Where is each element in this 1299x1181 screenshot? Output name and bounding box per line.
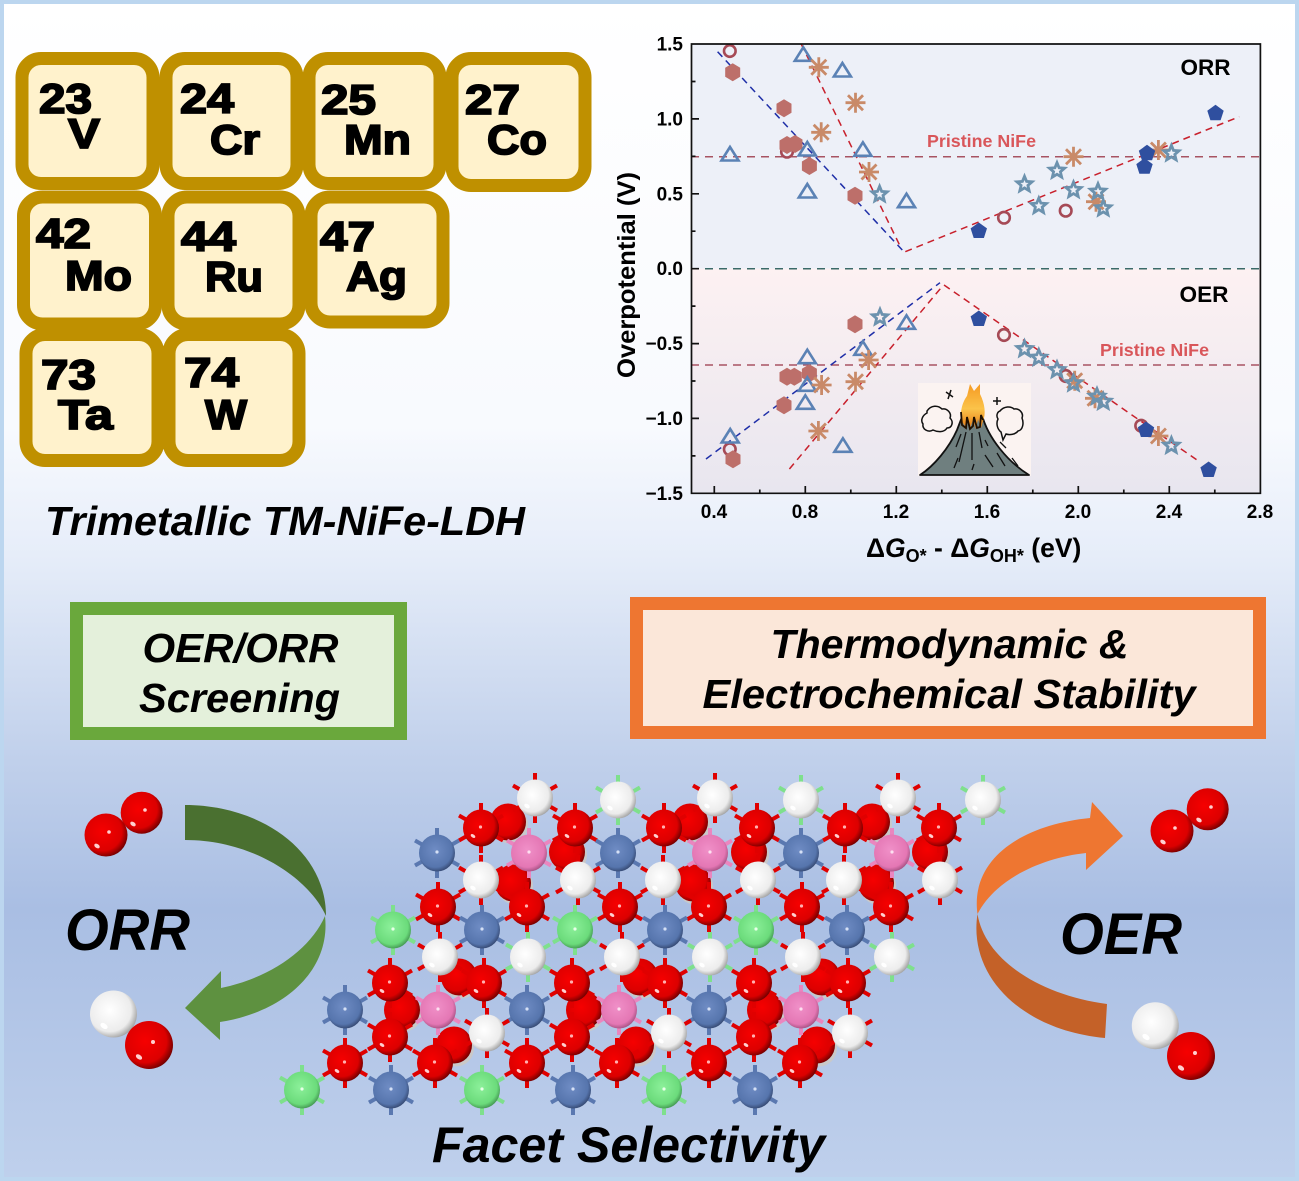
- series: stars: [872, 145, 1179, 452]
- arrow: OER: [976, 802, 1123, 1038]
- card: Mn: Mn: [344, 116, 411, 163]
- label: OER: OER: [1060, 902, 1182, 967]
- x axis title: OH*: [990, 546, 1024, 566]
- x axis tick labels: 0.8: [792, 502, 818, 523]
- card: V: V: [68, 110, 100, 157]
- card: Ag: 47: [320, 213, 375, 260]
- x axis title: G: [969, 533, 990, 563]
- pristine NiFe reference lines: [691, 157, 1260, 365]
- series: pentagons: [971, 105, 1224, 477]
- card: Mn: [309, 58, 440, 184]
- x axis title: O*: [906, 546, 927, 566]
- x axis tick labels: 2.8: [1247, 502, 1273, 523]
- label: OER: OER: [1180, 282, 1229, 307]
- x axis title: ΔG: [866, 533, 906, 563]
- card: Co: Co: [487, 116, 547, 163]
- y axis tick labels: 0.5: [657, 184, 683, 206]
- molecule: O2 right: [1150, 788, 1229, 852]
- card: V: [22, 58, 153, 184]
- card: Ta: [26, 334, 158, 460]
- card: Co: [452, 58, 585, 186]
- y axis tick labels: −1.5: [645, 484, 683, 505]
- card: V: 23: [39, 75, 92, 122]
- card: Ru: Ru: [205, 253, 263, 300]
- y axis title: Overpotential (V): [613, 172, 641, 378]
- series: hexagons: [725, 63, 862, 468]
- x axis tick labels: 1.6: [974, 502, 1000, 523]
- heading: Trimetallic TM-NiFe-LDH: Trimetallic TM-NiFe-LDH: [45, 498, 526, 544]
- box: OER/ORR Screening: [76, 608, 400, 734]
- icon: volcano: [918, 383, 1031, 476]
- x axis tick labels: [701, 502, 1273, 523]
- card: Mo: [24, 197, 156, 324]
- heading: Facet Selectivity: Facet Selectivity: [432, 1117, 827, 1173]
- box: OER/ORR Screening: Screening: [139, 675, 340, 721]
- y axis tick labels: [645, 34, 683, 505]
- chart frame and ticks: [692, 44, 1260, 493]
- box: Thermodynamic & Electrochemical Stability: [636, 604, 1260, 732]
- front atom rows: [280, 773, 1005, 1115]
- molecule: OH left: [90, 990, 173, 1069]
- card: Mo: 42: [36, 210, 91, 257]
- panel: OER region: [692, 269, 1260, 493]
- card: Ru: [168, 197, 299, 324]
- card: W: W: [205, 391, 247, 438]
- label: Pristine NiFe (ORR): Pristine NiFe: [927, 131, 1036, 151]
- back oxygen layer: [384, 804, 950, 1066]
- card: Co: 27: [465, 76, 520, 123]
- y axis tick labels: 1.5: [657, 34, 683, 56]
- label: ORR: ORR: [65, 898, 190, 963]
- volcano trend lines: [706, 44, 1239, 469]
- label: Pristine NiFe (OER): Pristine NiFe: [1100, 340, 1209, 360]
- card: Ag: Ag: [346, 253, 407, 300]
- x axis title: - Δ: [927, 533, 969, 563]
- card: Ag: [311, 197, 443, 322]
- box: OER/ORR Screening: OER/ORR: [142, 625, 339, 671]
- series: triangles: [722, 47, 915, 452]
- card: Cr: [166, 58, 297, 184]
- molecule: O2 left: [84, 792, 163, 856]
- card: Ta: 73: [41, 351, 96, 398]
- x axis tick labels: 2.0: [1065, 502, 1091, 523]
- box: Thermodynamic & Electrochemical Stability: Electrochemical Stability: [702, 671, 1198, 717]
- x axis tick labels: 2.4: [1156, 502, 1183, 523]
- x axis tick labels: 0.4: [701, 502, 728, 523]
- atomic structure: LDH slab: [280, 773, 1005, 1115]
- card: W: 74: [184, 349, 240, 396]
- panel: periodic table cards: [22, 58, 585, 460]
- y axis tick labels: 0.0: [657, 259, 683, 280]
- panel: ORR region: [692, 44, 1260, 269]
- card: Cr: Cr: [210, 116, 260, 163]
- molecule: OH right: [1132, 1002, 1215, 1080]
- card: Ru: 44: [181, 213, 237, 260]
- arrow: ORR: [185, 805, 326, 1040]
- chart: overpotential volcano plot: [613, 34, 1273, 566]
- box: Thermodynamic & Electrochemical Stability: Thermodynamic &: [770, 621, 1128, 667]
- series: open circles: [724, 45, 1147, 455]
- card: W: [169, 334, 299, 460]
- y axis tick labels: −0.5: [645, 334, 683, 355]
- y axis tick labels: −1.0: [645, 409, 683, 430]
- x axis tick labels: 1.2: [883, 502, 909, 523]
- card: Cr: 24: [180, 75, 235, 122]
- card: Mn: 25: [321, 76, 376, 123]
- card: Ta: Ta: [58, 391, 114, 438]
- x axis title: (eV): [1024, 533, 1081, 563]
- series: asterisks: [808, 57, 1168, 446]
- y axis tick labels: 1.0: [657, 110, 683, 130]
- label: ORR: ORR: [1180, 55, 1231, 80]
- card: Mo: Mo: [65, 252, 132, 299]
